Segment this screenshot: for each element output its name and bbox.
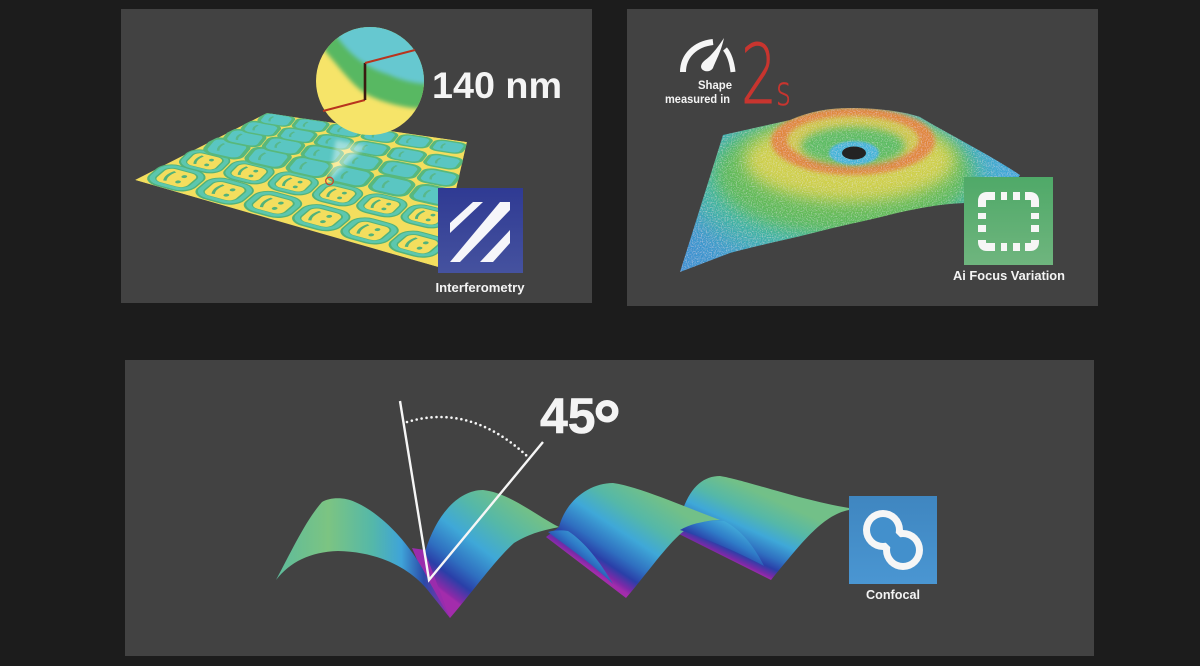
panel: confocal [125,360,1094,656]
label: Shape measured in: measured in [665,94,730,106]
magnified circle with step line [316,27,424,135]
value: 45 degrees [540,386,621,464]
value: 45 degrees: ° [593,386,621,464]
label: Interferometry: Interferometry [436,281,525,295]
panel: ai focus variation [627,9,1098,306]
icon: speed gauge [683,38,733,72]
icon: interferometry stripes [438,188,523,273]
angle lines [400,401,543,580]
measurement marker [326,177,333,185]
center hole [842,146,866,160]
label: Shape measured in: Shape [698,80,732,92]
light beam [329,140,366,181]
label: Confocal: Confocal [866,588,920,602]
value: 140 nm: 140 nm [432,65,562,106]
label: Ai Focus Variation: Ai Focus Variation [953,268,1065,283]
value: 45 degrees: 45 [540,388,596,444]
icon: focus variation dashed square [964,177,1053,265]
value: 2s: 2 [741,28,777,123]
value: 2s: s [776,69,791,115]
dotted angle arc [407,417,527,456]
surface: repeating arches [276,476,849,618]
surface: colour height map [680,108,1020,272]
surface: smiley pattern wafer [135,112,467,267]
panel: interferometry [121,9,592,303]
icon: confocal rings [849,496,937,584]
label: Shape measured in [665,80,732,106]
